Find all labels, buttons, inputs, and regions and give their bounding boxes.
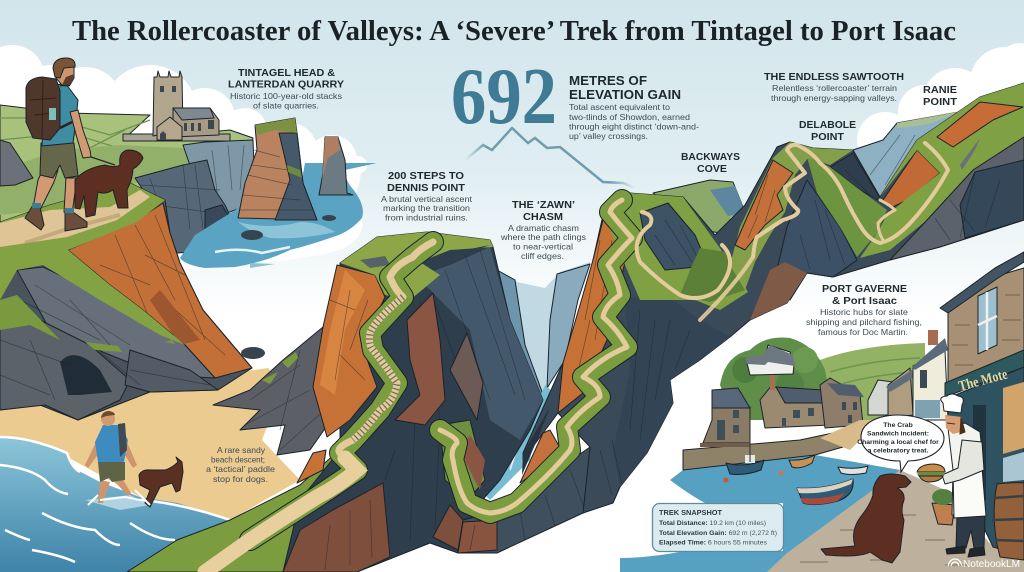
speech bubble: Charming a local chef for xyxy=(857,439,939,446)
label: beach: A rare sandy xyxy=(217,445,266,455)
label: tintagel head xyxy=(228,67,344,110)
chef xyxy=(941,394,986,557)
harbour buildings xyxy=(703,330,948,443)
barrel xyxy=(992,483,1024,560)
label: zawn chasm: cliff edges. xyxy=(521,251,564,261)
right grass xyxy=(860,83,1024,258)
clouds xyxy=(0,43,1024,270)
walking path xyxy=(0,190,150,247)
label: 200 steps: marking the transition xyxy=(383,203,470,213)
panel: trek snapshot xyxy=(652,504,784,552)
rocks in sea xyxy=(241,215,336,359)
right orange xyxy=(883,150,940,207)
sandwich xyxy=(917,464,945,482)
label: tintagel head: Historic 100-year-old stacks xyxy=(230,91,342,101)
far blue cliff xyxy=(853,110,970,200)
harbour hillside and trees xyxy=(720,338,925,420)
icon: church xyxy=(123,71,230,141)
label: ranie point xyxy=(923,84,958,108)
label: zawn chasm: where the path clings xyxy=(500,232,586,242)
label: 200 steps xyxy=(381,170,473,222)
label: backways cove xyxy=(681,151,740,175)
zawn and sawtooth mountain mass xyxy=(520,83,1024,513)
notebooklm watermark: NotebookLM xyxy=(963,558,1020,570)
panel: trek snapshot: Total Distance: 19.2 km (10 miles) xyxy=(659,520,766,527)
pub building xyxy=(940,252,1024,556)
orange cliff face xyxy=(68,203,252,378)
icon: seated brown dog xyxy=(821,474,911,563)
beach sea xyxy=(0,437,230,572)
sea behind stacks xyxy=(180,163,377,268)
shop front xyxy=(948,367,1024,556)
stat: 692 metres: 692 xyxy=(451,53,557,141)
speech bubble: The Crab xyxy=(883,422,913,429)
distant grey cliffs xyxy=(135,140,254,253)
right grey rock xyxy=(890,137,1024,260)
label: zawn chasm: A dramatic chasm xyxy=(508,223,579,233)
label: port gaverne: Historic hubs for slate xyxy=(820,307,908,317)
orange face xyxy=(313,265,385,437)
title: The Rollercoaster of Valleys: A ‘Severe’ Trek from Tintagel to Port Isaac xyxy=(72,16,956,47)
brown faces xyxy=(395,293,445,425)
label: delabole point: DELABOLE xyxy=(799,119,856,131)
label: tintagel head: of slate quarries. xyxy=(253,100,319,110)
quay pavement xyxy=(767,470,1024,572)
pavement stones xyxy=(800,515,969,565)
label: delabole point xyxy=(799,119,856,143)
label: endless sawtooth: through energy-sapping valleys. xyxy=(771,93,897,103)
central cliff xyxy=(205,232,543,572)
label: tintagel head: LANTERDAN QUARRY xyxy=(228,78,344,90)
orange zawn face xyxy=(558,215,627,413)
label: port gaverne: PORT GAVERNE xyxy=(822,283,907,295)
label: endless sawtooth xyxy=(764,71,904,103)
label: 200 steps: DENNIS POINT xyxy=(387,182,466,194)
stat: 692 metres: ELEVATION GAIN xyxy=(569,87,681,102)
label: port gaverne: famous for Doc Martin. xyxy=(818,327,908,337)
stat: 692 metres xyxy=(451,53,699,141)
white cottage xyxy=(747,345,794,375)
label: port gaverne: shipping and pilchard fishing, xyxy=(806,317,922,327)
pub window xyxy=(978,287,997,354)
label: beach: a ‘tactical’ paddle xyxy=(206,464,275,474)
stone houses xyxy=(703,407,750,443)
sea stack: small xyxy=(319,137,353,195)
panel: trek snapshot: Total Elevation Gain: 692 m (2,272 ft) xyxy=(659,530,777,537)
top grass xyxy=(340,232,493,300)
grey side rocks xyxy=(213,327,345,455)
green slope xyxy=(603,193,748,310)
left foreground headland xyxy=(0,140,252,420)
label: backways cove: COVE xyxy=(697,163,727,175)
dark strata xyxy=(613,290,730,487)
stair grass band xyxy=(250,242,433,540)
stat: 692 metres: up’ valley crossings. xyxy=(569,131,648,141)
sea stack: large xyxy=(238,118,317,220)
icon: small dog xyxy=(139,457,183,507)
harbour wall xyxy=(683,420,880,470)
icon: small hiker xyxy=(85,411,137,503)
dark main mass xyxy=(283,232,543,572)
zawn lower cliffs xyxy=(433,420,613,553)
harbour sea xyxy=(620,455,900,572)
label: zawn chasm xyxy=(500,199,586,261)
label: ranie point: POINT xyxy=(923,96,958,108)
label: 200 steps: A brutal vertical ascent xyxy=(381,194,473,204)
chasm background xyxy=(485,262,590,500)
label: zawn chasm: THE ‘ZAWN’ xyxy=(512,199,575,211)
label: port gaverne xyxy=(806,283,922,337)
elevation line xyxy=(465,128,635,188)
grass slope xyxy=(0,183,185,345)
mid orange and rock xyxy=(778,180,857,300)
boats xyxy=(723,440,868,505)
speech bubble: a celebratory treat. xyxy=(868,448,929,454)
panel: trek snapshot: TREK SNAPSHOT xyxy=(659,508,722,517)
label: endless sawtooth: Relentless ‘rollercoaster’ terrain xyxy=(772,83,897,93)
stat: 692 metres: METRES OF xyxy=(569,73,647,88)
hiker with dog on clifftop xyxy=(25,58,143,231)
icon: hiker xyxy=(25,58,115,231)
label: tintagel head: TINTAGEL HEAD & xyxy=(238,67,335,79)
stat: 692 metres: Total ascent equivalent to xyxy=(569,102,670,112)
stat: 692 metres: through eight distinct ‘down-and- xyxy=(569,122,699,132)
label: 200 steps: 200 STEPS TO xyxy=(388,170,464,182)
beach xyxy=(0,368,300,520)
lower grass and path to central cliff xyxy=(127,445,360,572)
speech bubble xyxy=(857,415,944,472)
dark rock strata xyxy=(17,267,215,378)
label: beach: beach descent; xyxy=(211,454,265,464)
pub name: The Mote xyxy=(957,366,1010,395)
label: beach: stop for dogs. xyxy=(213,474,268,484)
hiker paddling on beach xyxy=(85,411,183,507)
label: zawn chasm: to near-vertical xyxy=(513,242,573,252)
panel: trek snapshot: Elapsed Time: 6 hours 55 minutes xyxy=(659,540,768,546)
label: port gaverne: & Port Isaac xyxy=(832,295,897,307)
plant pot xyxy=(932,489,955,525)
stat: 692 metres: two-tlinds of Showdon, earned xyxy=(569,112,690,122)
label: delabole point: POINT xyxy=(811,131,845,143)
label: backways cove: BACKWAYS xyxy=(681,151,740,163)
label: zawn chasm: CHASM xyxy=(523,211,563,223)
backways cove headland xyxy=(653,180,760,235)
label: ranie point: RANIE xyxy=(923,84,957,96)
label: 200 steps: from industrial ruins. xyxy=(385,212,468,222)
zawn green ridge with winding path xyxy=(440,143,948,513)
speech bubble: Sandwich incident: xyxy=(867,430,929,438)
label: beach xyxy=(206,445,275,484)
street houses xyxy=(868,380,895,415)
label: endless sawtooth: THE ENDLESS SAWTOOTH xyxy=(764,71,904,83)
stairway path xyxy=(205,242,433,572)
distant hills xyxy=(0,105,253,225)
icon: dog on cliff xyxy=(75,150,143,217)
